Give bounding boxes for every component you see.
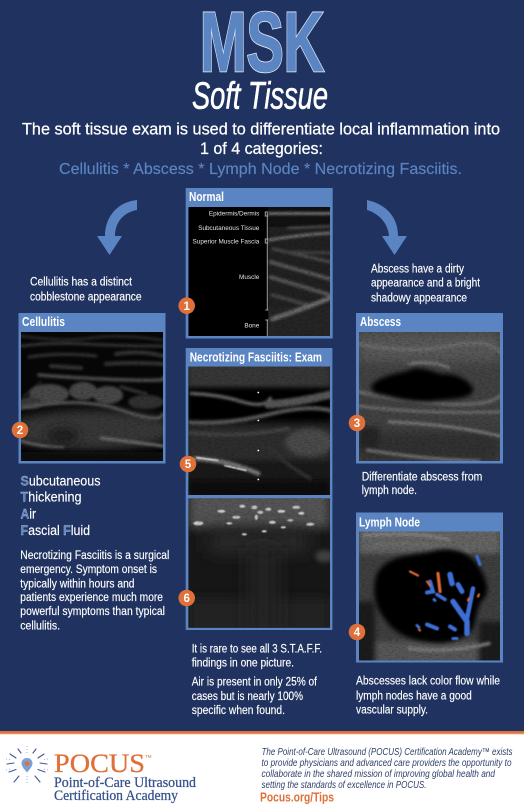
text: rare to see all STAFF findings: specific when found.	[192, 705, 285, 717]
badge 4	[349, 624, 365, 640]
text: abscesses lack color flow: Abscesses lack color flow while	[356, 675, 500, 687]
text: rare to see all STAFF findings: Air is present in only 25% of	[192, 676, 318, 688]
ultrasound: normal with labels	[188, 207, 330, 336]
text: STAFF mnemonic: Fascial Fluid	[20, 523, 90, 538]
text: STAFF mnemonic: Subcutaneous	[20, 474, 101, 489]
badge 3	[349, 415, 365, 431]
categories line: Cellulitis * Abscess * Lymph Node * Necrotizing Fasciitis.	[59, 161, 462, 178]
intro text: The soft tissue exam is used to differentiate local inflammation into	[22, 120, 500, 138]
text: rare to see all STAFF findings	[192, 644, 322, 717]
ultrasound: necrotizing fasciitis bottom	[188, 498, 330, 628]
footer link: Pocus.org/Tips	[260, 791, 334, 805]
panel: cellulitis	[6, 313, 176, 466]
footer	[0, 731, 524, 812]
panel: lymph node	[349, 512, 505, 666]
intro text	[22, 120, 500, 158]
text: differentiate abscess	[362, 472, 482, 497]
logo wordmark: POCUS	[54, 748, 145, 778]
badge 5	[180, 456, 196, 472]
text: cellulitis description: Cellulitis has a distinct	[30, 277, 133, 289]
ultrasound: lymph node with doppler	[359, 532, 500, 660]
text: rare to see all STAFF findings: It is rare to see all 3 S.T.A.F.F.	[192, 644, 322, 656]
logo wordmark	[54, 748, 196, 804]
footer statement: setting the standards of excellence in POCUS.	[262, 780, 426, 791]
ultrasound: cellulitis	[21, 332, 163, 461]
ultrasound: normal with labels: Epidermis/Dermis	[209, 211, 259, 218]
ultrasound: abscess	[359, 332, 500, 461]
panel: abscess	[349, 313, 503, 464]
text: cellulitis description: cobblestone appearance	[30, 292, 142, 304]
footer statement	[262, 747, 512, 791]
text: differentiate abscess: lymph node.	[362, 485, 417, 497]
badge 6	[178, 590, 195, 606]
text: abscess description: appearance and a bright	[371, 278, 481, 290]
badge 2: 2	[17, 425, 23, 437]
text: necrotizing fasciitis description: patients experience much more	[20, 592, 163, 604]
badge 3: 3	[354, 418, 360, 430]
text: rare to see all STAFF findings: findings in one picture.	[192, 658, 294, 670]
title: MSK	[200, 0, 324, 89]
text: necrotizing fasciitis description: powerful symptoms than typical	[20, 606, 165, 618]
ultrasound: normal with labels: Muscle	[239, 274, 260, 281]
badge 6: 6	[183, 593, 190, 605]
heading: cellulitis: Cellulitis	[22, 315, 65, 329]
subtitle: Soft Tissue: Soft Tissue	[192, 76, 328, 118]
arrow: left curved	[97, 200, 137, 255]
text: necrotizing fasciitis description: cellulitis.	[20, 620, 60, 632]
panel: normal	[178, 188, 333, 338]
logo wordmark: TM	[145, 754, 152, 759]
intro text: 1 of 4 categories:	[200, 140, 323, 158]
text: differentiate abscess: Differentiate abscess from	[362, 472, 482, 484]
text: abscesses lack color flow	[356, 675, 500, 716]
text: STAFF mnemonic: Air	[20, 506, 36, 522]
arrow: right curved	[367, 200, 407, 255]
ultrasound: normal with labels: Superior Muscle Fascia	[193, 239, 260, 246]
text: abscess description	[371, 264, 481, 305]
text: abscess description: shadowy appearance	[371, 293, 467, 305]
text: necrotizing fasciitis description: typically within hours and	[20, 578, 134, 590]
heading: necrotizing fasciitis: Necrotizing Fasciitis: Exam	[190, 351, 322, 365]
text: necrotizing fasciitis description: emergency. Symptom onset is	[20, 564, 157, 576]
logo wordmark: Point-of-Care Ultrasound	[54, 775, 196, 791]
ultrasound: necrotizing fasciitis top	[188, 366, 330, 495]
logo icon: radiating pin	[6, 746, 48, 785]
badge 5: 5	[185, 459, 192, 471]
text: STAFF mnemonic	[20, 474, 101, 538]
ultrasound: normal with labels: Bone	[244, 323, 260, 330]
logo wordmark: Certification Academy	[54, 788, 178, 804]
text: abscesses lack color flow: vascular supply.	[356, 704, 428, 716]
ultrasound: normal with labels: Subcutaneous Tissue	[198, 225, 260, 232]
text: abscess description: Abscess have a dirty	[371, 264, 464, 276]
text: STAFF mnemonic: Thickening	[20, 490, 82, 505]
text: cellulitis description	[30, 277, 142, 304]
badge 1: 1	[183, 301, 190, 313]
text: necrotizing fasciitis description	[20, 550, 169, 632]
text: necrotizing fasciitis description: Necrotizing Fasciitis is a surgical	[20, 550, 169, 562]
heading: lymph node: Lymph Node	[359, 516, 420, 530]
badge 2	[12, 422, 28, 438]
heading: normal: Normal	[189, 190, 224, 204]
badge 1	[178, 297, 195, 314]
panel: necrotizing fasciitis	[178, 348, 333, 638]
badge 4: 4	[354, 627, 361, 639]
text: abscesses lack color flow: lymph nodes have a good	[356, 690, 472, 702]
heading: abscess: Abscess	[360, 315, 401, 329]
text: rare to see all STAFF findings: cases but is nearly 100%	[192, 691, 303, 703]
